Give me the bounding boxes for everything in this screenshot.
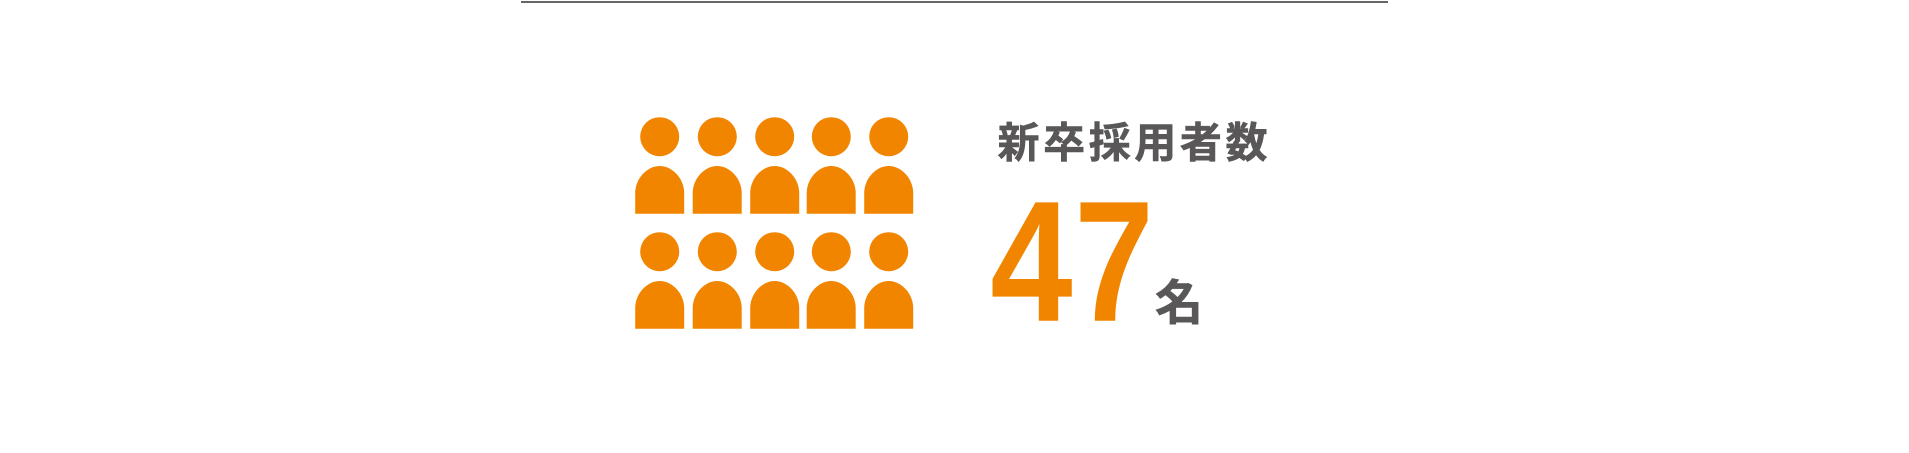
person row 1 col 5 <box>864 117 913 214</box>
big number: 47 <box>990 165 1154 358</box>
person row 1 col 2 <box>693 117 742 214</box>
person row 2 col 1 <box>635 232 684 329</box>
person row 1 col 4 <box>807 117 856 214</box>
person row 2 col 4 <box>807 232 856 329</box>
pictogram: 10 people <box>635 117 913 329</box>
person row 1 col 3 <box>750 117 799 214</box>
unit: 名 <box>1155 278 1203 330</box>
person row 2 col 5 <box>864 232 913 329</box>
person row 2 col 3 <box>750 232 799 329</box>
digit 4: 4 <box>990 165 1073 357</box>
heading: 新卒採用者数 <box>998 120 1271 166</box>
person row 1 col 1 <box>635 117 684 214</box>
top rule <box>521 1 1388 3</box>
person row 2 col 2 <box>693 232 742 329</box>
digit 7: 7 <box>1074 166 1154 358</box>
